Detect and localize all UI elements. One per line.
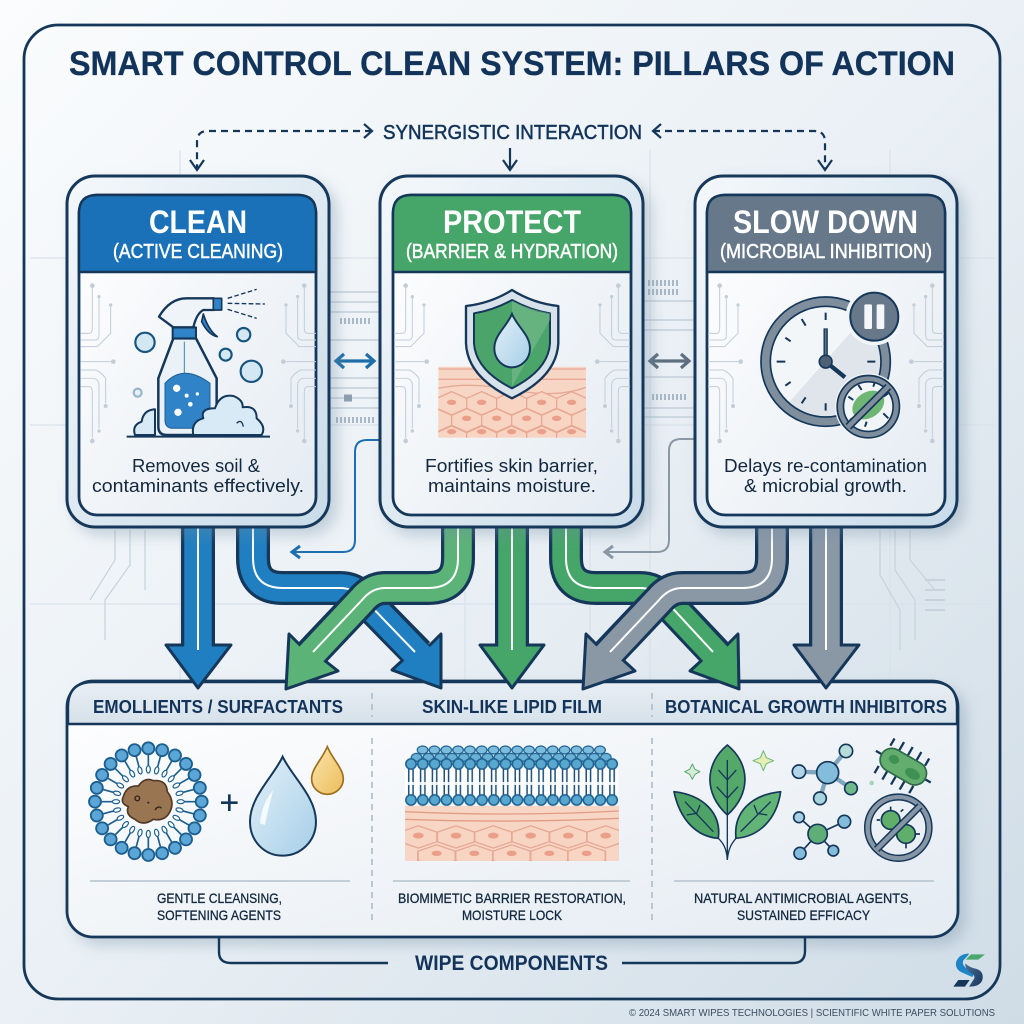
pause badge [846,288,903,345]
description: contaminants effectively. [92,476,304,496]
bracket [219,938,805,963]
footer credit: © 2024 SMART WIPES TECHNOLOGIES | SCIENTIFIC WHITE PAPER SOLUTIONS [629,1007,995,1019]
synergy label: SYNERGISTIC INTERACTION [383,122,642,144]
caption rule 1 [90,880,934,882]
feedback arrow: blue [292,440,381,558]
card body [707,195,945,515]
plus sign [221,794,238,811]
subheading: (MICROBIAL INHIBITION) [720,241,932,263]
circuit decoration [394,283,630,443]
bacterium [865,732,942,801]
no-microbe sign [868,797,929,858]
bracket label: WIPE COMPONENTS [415,952,608,975]
heading: emollients: EMOLLIENTS / SURFACTANTS [93,697,343,717]
description: maintains moisture. [428,476,596,496]
heading: botanical: BOTANICAL GROWTH INHIBITORS [665,697,947,717]
clock [766,302,886,422]
synergistic interaction label and arrows [190,122,832,170]
bubbles [134,328,262,397]
card body [79,195,316,515]
circuit decoration [708,283,944,443]
description: Removes soil & [132,456,260,476]
bottle body [158,338,217,435]
dashed arrow: right [653,124,832,170]
shield [466,290,558,398]
panel: slow down [695,176,957,527]
card header [707,195,945,272]
heading: CLEAN [149,204,247,240]
molecule 1 [792,744,857,805]
card frame [67,176,329,527]
card frame [380,176,643,527]
molecule 2 [794,812,851,859]
foam [193,396,263,435]
background circuit pattern [30,150,995,680]
caption: emollients: GENTLE CLEANSING, [157,890,282,906]
dashed arrow: left [190,124,372,170]
panel: protect [380,176,643,527]
heading: SLOW DOWN [733,204,918,240]
arrow: clean curved [253,526,441,688]
logo [953,954,985,987]
skin layer [405,806,619,861]
connector: clean to protect double arrow [336,354,374,368]
leaves [674,745,781,860]
panel: clean [67,176,329,527]
description: Fortifies skin barrier, [425,456,598,476]
arrow: protect curved left [286,526,458,689]
arrow: slow down curved [583,526,772,689]
icon: botanical inhibitors [674,732,942,860]
ground line [127,434,270,440]
card body [393,195,631,515]
arrow: protect curved right [566,526,739,689]
card header [393,195,631,272]
bottle liquid [165,373,210,428]
icon: spray bottle [127,289,270,437]
heading: lipid film: SKIN-LIKE LIPID FILM [422,697,602,717]
arrow: slow down straight [794,526,859,688]
no-microbe badge [835,373,902,440]
card frame [695,176,957,527]
caption: emollients: SOFTENING AGENTS [157,907,281,923]
wipe components bracket and label [219,938,805,975]
subheading: (BARRIER & HYDRATION) [406,241,618,263]
subheading: (ACTIVE CLEANING) [113,241,283,263]
icon: lipid bilayer over skin [400,745,624,867]
description: & microbial growth. [744,476,907,496]
spray mist [228,289,265,318]
title: SMART CONTROL CLEAN SYSTEM: PILLARS OF ACTION [69,45,955,83]
dashed arrow: centre [503,148,517,170]
caption: botanical: SUSTAINED EFFICACY [737,907,871,923]
trigger head [159,298,214,327]
skin [438,366,586,438]
water drop [494,314,530,367]
description: Delays re-contamination [724,456,927,476]
lipid bilayer [405,745,618,807]
bottle collar [173,327,196,338]
micelle [89,742,208,861]
panel: wipe components [67,681,958,937]
panel background [67,681,958,937]
heading: PROTECT [443,204,581,240]
arrow: protect straight [480,526,544,688]
column dividers [372,693,652,922]
icon: shield over skin [438,288,586,438]
oil drop [312,747,343,794]
water drop [250,757,316,856]
connector: protect to slow down double arrow [650,354,689,368]
caption: botanical: NATURAL ANTIMICROBIAL AGENTS, [694,890,912,906]
caption: lipid film: BIOMIMETIC BARRIER RESTORATION, [398,890,626,906]
card header [79,195,316,272]
arrow: clean straight [166,526,231,688]
circuit decoration [81,283,316,443]
panel header band [68,682,957,724]
icon: micelle and droplets [89,742,343,861]
feedback arrow: gray [605,439,695,558]
caption: lipid film: MOISTURE LOCK [462,907,563,923]
icon: clock with pause and no-microbe [766,288,903,440]
